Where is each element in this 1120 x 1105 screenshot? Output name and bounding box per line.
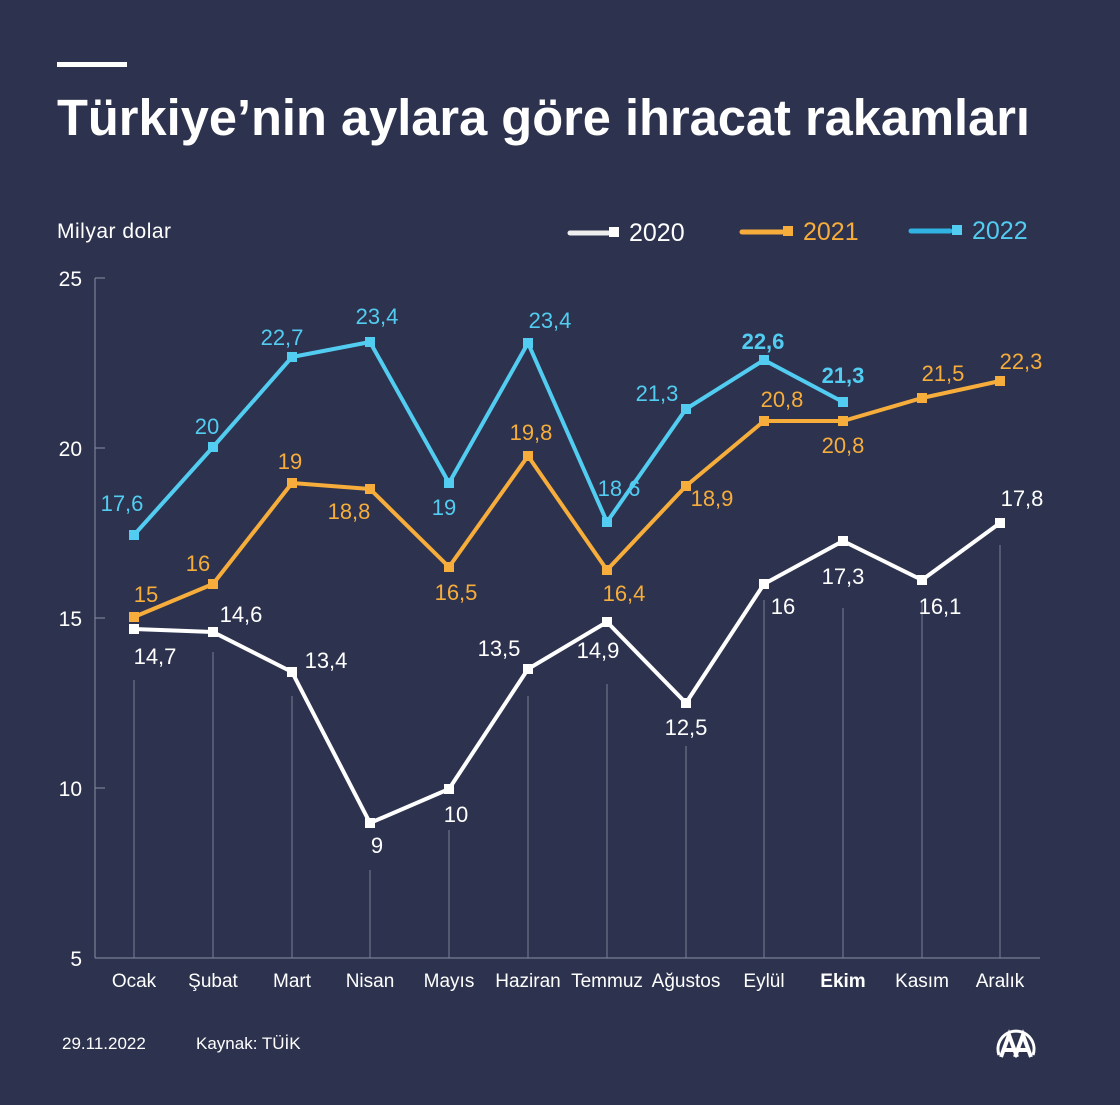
legend: [570, 217, 1028, 247]
labels 2022: 23,4: [529, 308, 571, 333]
drop lines: [134, 545, 1000, 958]
x labels: Ocak: [112, 971, 157, 992]
source: Kaynak: TÜİK: [196, 1034, 301, 1053]
labels 2021: 22,3: [1000, 349, 1042, 374]
y labels: 25: [59, 268, 82, 291]
date: 29.11.2022: [62, 1034, 146, 1053]
labels 2021: 16,4: [603, 581, 645, 606]
labels 2020: 14,9: [577, 638, 619, 663]
labels 2020: 16,1: [919, 594, 961, 619]
x labels: Ağustos: [652, 971, 720, 992]
labels 2020: 13,4: [305, 648, 347, 673]
axes: [95, 278, 1040, 958]
x labels: Kasım: [895, 971, 949, 992]
y labels: 10: [59, 778, 82, 801]
labels 2021: [134, 349, 1042, 607]
labels 2020: 9: [371, 833, 383, 858]
line 2020: [129, 518, 1005, 828]
labels 2022: 21,3: [822, 363, 864, 388]
x labels: Ekim: [820, 971, 866, 992]
labels 2022: 20: [195, 414, 219, 439]
labels 2022: 17,6: [101, 491, 143, 516]
labels 2022: 22,7: [261, 325, 303, 350]
y axis unit label: Milyar dolar: [57, 220, 172, 243]
x labels: Temmuz: [571, 971, 643, 992]
labels 2020: 16: [771, 594, 795, 619]
x labels: Nisan: [346, 971, 394, 992]
labels 2022: 21,3: [636, 381, 678, 406]
legend: 2020: [629, 219, 685, 247]
x labels: Eylül: [743, 971, 785, 992]
labels 2021: 15: [134, 582, 158, 607]
icon: AA logo: [998, 1031, 1034, 1057]
x labels: [112, 971, 1025, 992]
x labels: Mayıs: [424, 971, 474, 992]
labels 2020: 14,6: [220, 602, 262, 627]
labels 2022: 18,6: [598, 476, 640, 501]
y labels: [59, 268, 82, 971]
x labels: Şubat: [188, 971, 239, 992]
labels 2021: 16: [186, 551, 210, 576]
labels 2020: 12,5: [665, 715, 707, 740]
labels 2020: 10: [444, 802, 468, 827]
legend: 2021: [803, 218, 859, 246]
x labels: Haziran: [495, 971, 561, 992]
labels 2021: 19,8: [510, 420, 552, 445]
title: Türkiye’nin aylara göre ihracat rakamları: [57, 89, 1030, 146]
labels 2021: 20,8: [822, 433, 864, 458]
labels 2021: 18,8: [328, 499, 370, 524]
labels 2020: 17,8: [1001, 486, 1043, 511]
y labels: 5: [70, 948, 82, 971]
x labels: Aralık: [976, 971, 1025, 992]
y labels: 15: [59, 608, 82, 631]
x labels: Mart: [273, 971, 312, 992]
labels 2022: 22,6: [742, 329, 784, 354]
title bar accent: [57, 62, 127, 67]
labels 2022: 23,4: [356, 304, 398, 329]
line 2022: [129, 337, 848, 540]
labels 2021: 20,8: [761, 387, 803, 412]
y labels: 20: [59, 438, 82, 461]
line 2021: [129, 376, 1005, 622]
labels 2021: 18,9: [691, 486, 733, 511]
labels 2020: 13,5: [478, 636, 520, 661]
labels 2020: 14,7: [134, 644, 176, 669]
labels 2020: [134, 486, 1043, 858]
labels 2022: [101, 304, 864, 520]
labels 2020: 17,3: [822, 564, 864, 589]
labels 2021: 19: [278, 449, 302, 474]
legend: 2022: [972, 217, 1028, 245]
labels 2021: 21,5: [922, 361, 964, 386]
labels 2021: 16,5: [435, 580, 477, 605]
labels 2022: 19: [432, 495, 456, 520]
